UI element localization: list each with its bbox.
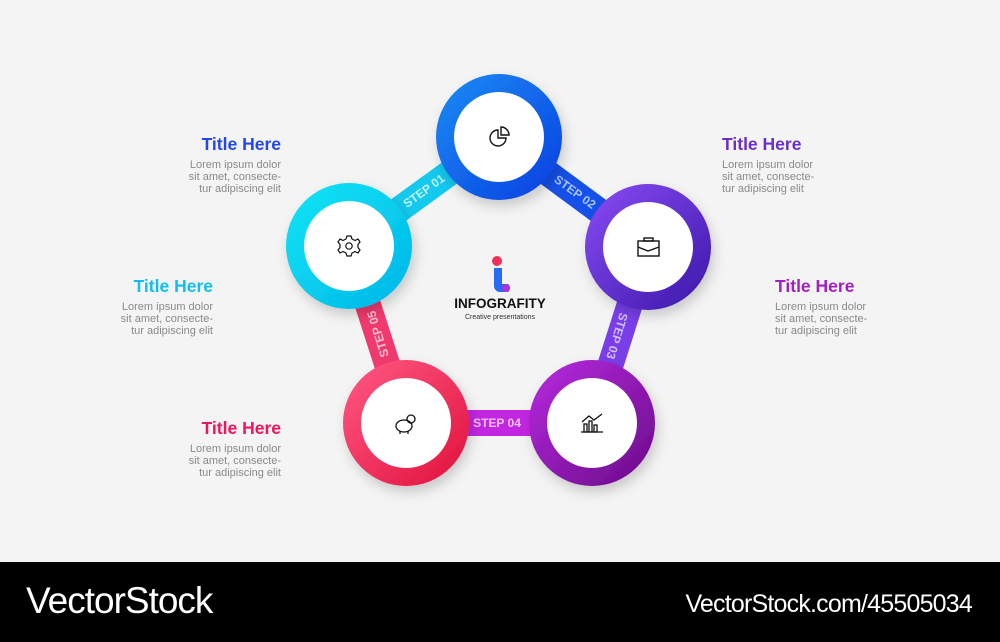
text block: step 4: Title Here: [775, 276, 854, 296]
circle: step 5 bottom left (piggy bank icon): [343, 360, 469, 486]
footer url: VectorStock.com/45505034: [685, 590, 972, 618]
connector: step 02: [499, 137, 648, 247]
circle: step 4 bottom right (chart icon): [529, 360, 655, 486]
connector: step 02: STEP 02: [552, 172, 599, 212]
text block: step 4: tur adipiscing elit: [775, 325, 857, 337]
text block: step 1: Title Here: [134, 276, 213, 296]
text block: step 4: sit amet, consecte-: [775, 313, 867, 325]
text block: step 4: Lorem ipsum dolor: [775, 301, 866, 313]
text block: step 5: Lorem ipsum dolor: [190, 443, 281, 455]
circle: step 2 top (pie chart icon): [436, 74, 562, 200]
connector: step 01: STEP 01: [401, 171, 448, 211]
text block: step 5: sit amet, consecte-: [189, 455, 281, 467]
footer brand: VectorStock: [26, 580, 212, 621]
text block: step 1: tur adipiscing elit: [131, 325, 213, 337]
text block: step 1: Lorem ipsum dolor: [122, 301, 213, 313]
footer bar: [0, 562, 1000, 642]
text block: step 2: Title Here: [202, 134, 281, 154]
text block: step 3: [722, 134, 814, 195]
text block: step 4: [775, 276, 867, 337]
text block: step 3: tur adipiscing elit: [722, 183, 804, 195]
text block: step 3: sit amet, consecte-: [722, 171, 814, 183]
connector: step 03: STEP 03: [603, 311, 631, 361]
text block: step 3: Title Here: [722, 134, 801, 154]
circle: step 3 right (briefcase icon): [585, 184, 711, 310]
text block: step 2: [189, 134, 281, 195]
connector: step 05: [349, 246, 406, 423]
logo: INFOGRAFITY: [454, 296, 546, 311]
text block: step 2: tur adipiscing elit: [199, 183, 281, 195]
logo: [454, 256, 546, 321]
text block: step 2: Lorem ipsum dolor: [190, 159, 281, 171]
connector: step 03: [592, 247, 648, 423]
connector: step 05: STEP 05: [364, 309, 392, 359]
circle: step 1 left (gear icon): [286, 183, 412, 309]
text block: step 3: Lorem ipsum dolor: [722, 159, 813, 171]
text block: step 5: tur adipiscing elit: [199, 467, 281, 479]
text block: step 2: sit amet, consecte-: [189, 171, 281, 183]
text block: step 1: sit amet, consecte-: [121, 313, 213, 325]
text block: step 5: [189, 418, 281, 479]
connector: step 04: STEP 04: [473, 416, 521, 430]
logo: Creative presentations: [465, 314, 536, 321]
text block: step 1: [121, 276, 213, 337]
connector: step 01: [349, 137, 499, 246]
text block: step 5: Title Here: [202, 418, 281, 438]
